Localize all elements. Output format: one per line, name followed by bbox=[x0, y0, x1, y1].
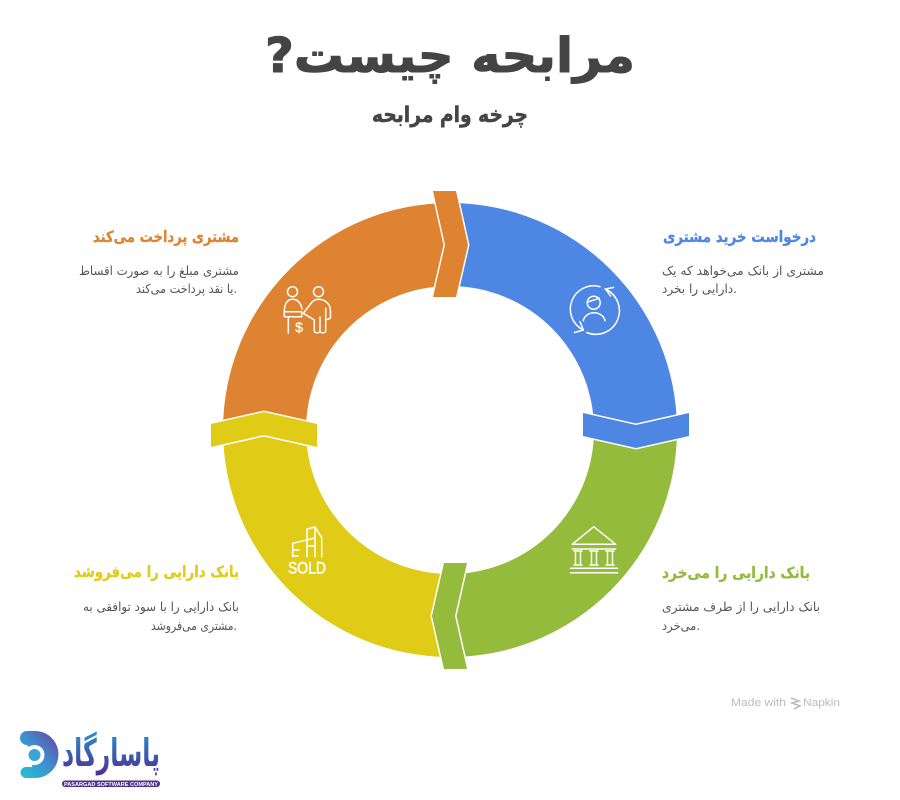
text block: bank buys: بانک دارایی را می‌خرد bbox=[662, 564, 810, 582]
text block: bank sells: مشتری می‌فروشد. bbox=[151, 618, 237, 634]
logo wordmark: پاسارگاد bbox=[62, 731, 160, 775]
title: مرابحه چیست? bbox=[265, 28, 635, 84]
icon: sold building bbox=[288, 527, 326, 577]
text block: bank sells: بانک دارایی را با سود توافقی به bbox=[83, 599, 239, 615]
logo mark bbox=[20, 731, 58, 778]
icon: customer paying at desk bbox=[284, 287, 330, 335]
watermark: made with napkin: Made with bbox=[731, 697, 786, 709]
text block: customer pays: مشتری پرداخت می‌کند bbox=[93, 228, 239, 247]
watermark: made with napkin bbox=[731, 697, 840, 709]
text block: customer request bbox=[662, 228, 824, 297]
segment: bank buys (green) bbox=[450, 430, 677, 657]
text block: bank buys: می‌خرد. bbox=[662, 618, 700, 634]
segment: customer request (blue) bbox=[450, 203, 677, 430]
text block: customer pays: مشتری مبلغ را به صورت اقساط bbox=[79, 263, 239, 279]
arrow: blue chevron bbox=[583, 413, 689, 448]
text block: bank sells bbox=[74, 563, 239, 634]
text block: customer pays bbox=[79, 228, 239, 297]
text block: customer request: درخواست خرید مشتری bbox=[663, 228, 816, 246]
logo: pasargad software company bbox=[20, 731, 160, 788]
segment: customer pays (orange) bbox=[223, 203, 450, 430]
text block: customer pays: یا نقد پرداخت می‌کند. bbox=[136, 281, 237, 297]
text block: bank buys bbox=[662, 564, 820, 634]
arrow: yellow chevron bbox=[211, 412, 317, 447]
text block: bank sells: بانک دارایی را می‌فروشد bbox=[74, 563, 239, 581]
text block: bank buys: بانک دارایی را از طرف مشتری bbox=[662, 599, 820, 615]
subtitle: چرخه وام مرابحه bbox=[372, 103, 528, 128]
text block: customer request: دارایی را بخرد. bbox=[662, 281, 737, 297]
text block: customer request: مشتری از بانک می‌خواهد که یک bbox=[662, 263, 824, 279]
arrow: orange chevron bbox=[433, 191, 468, 297]
icon: bank building bbox=[570, 527, 618, 573]
icon: person in cycle bbox=[570, 286, 619, 334]
logo tagline: PASARGAD SOFTWARE COMPANY bbox=[64, 782, 158, 788]
watermark: made with napkin: Napkin bbox=[803, 697, 840, 709]
arrow: green chevron bbox=[432, 563, 467, 669]
segment: bank sells (yellow) bbox=[223, 430, 450, 657]
cycle diagram bbox=[211, 191, 689, 669]
icon: customer paying at desk: $ bbox=[295, 319, 303, 335]
icon: sold building: SOLD bbox=[288, 558, 326, 577]
